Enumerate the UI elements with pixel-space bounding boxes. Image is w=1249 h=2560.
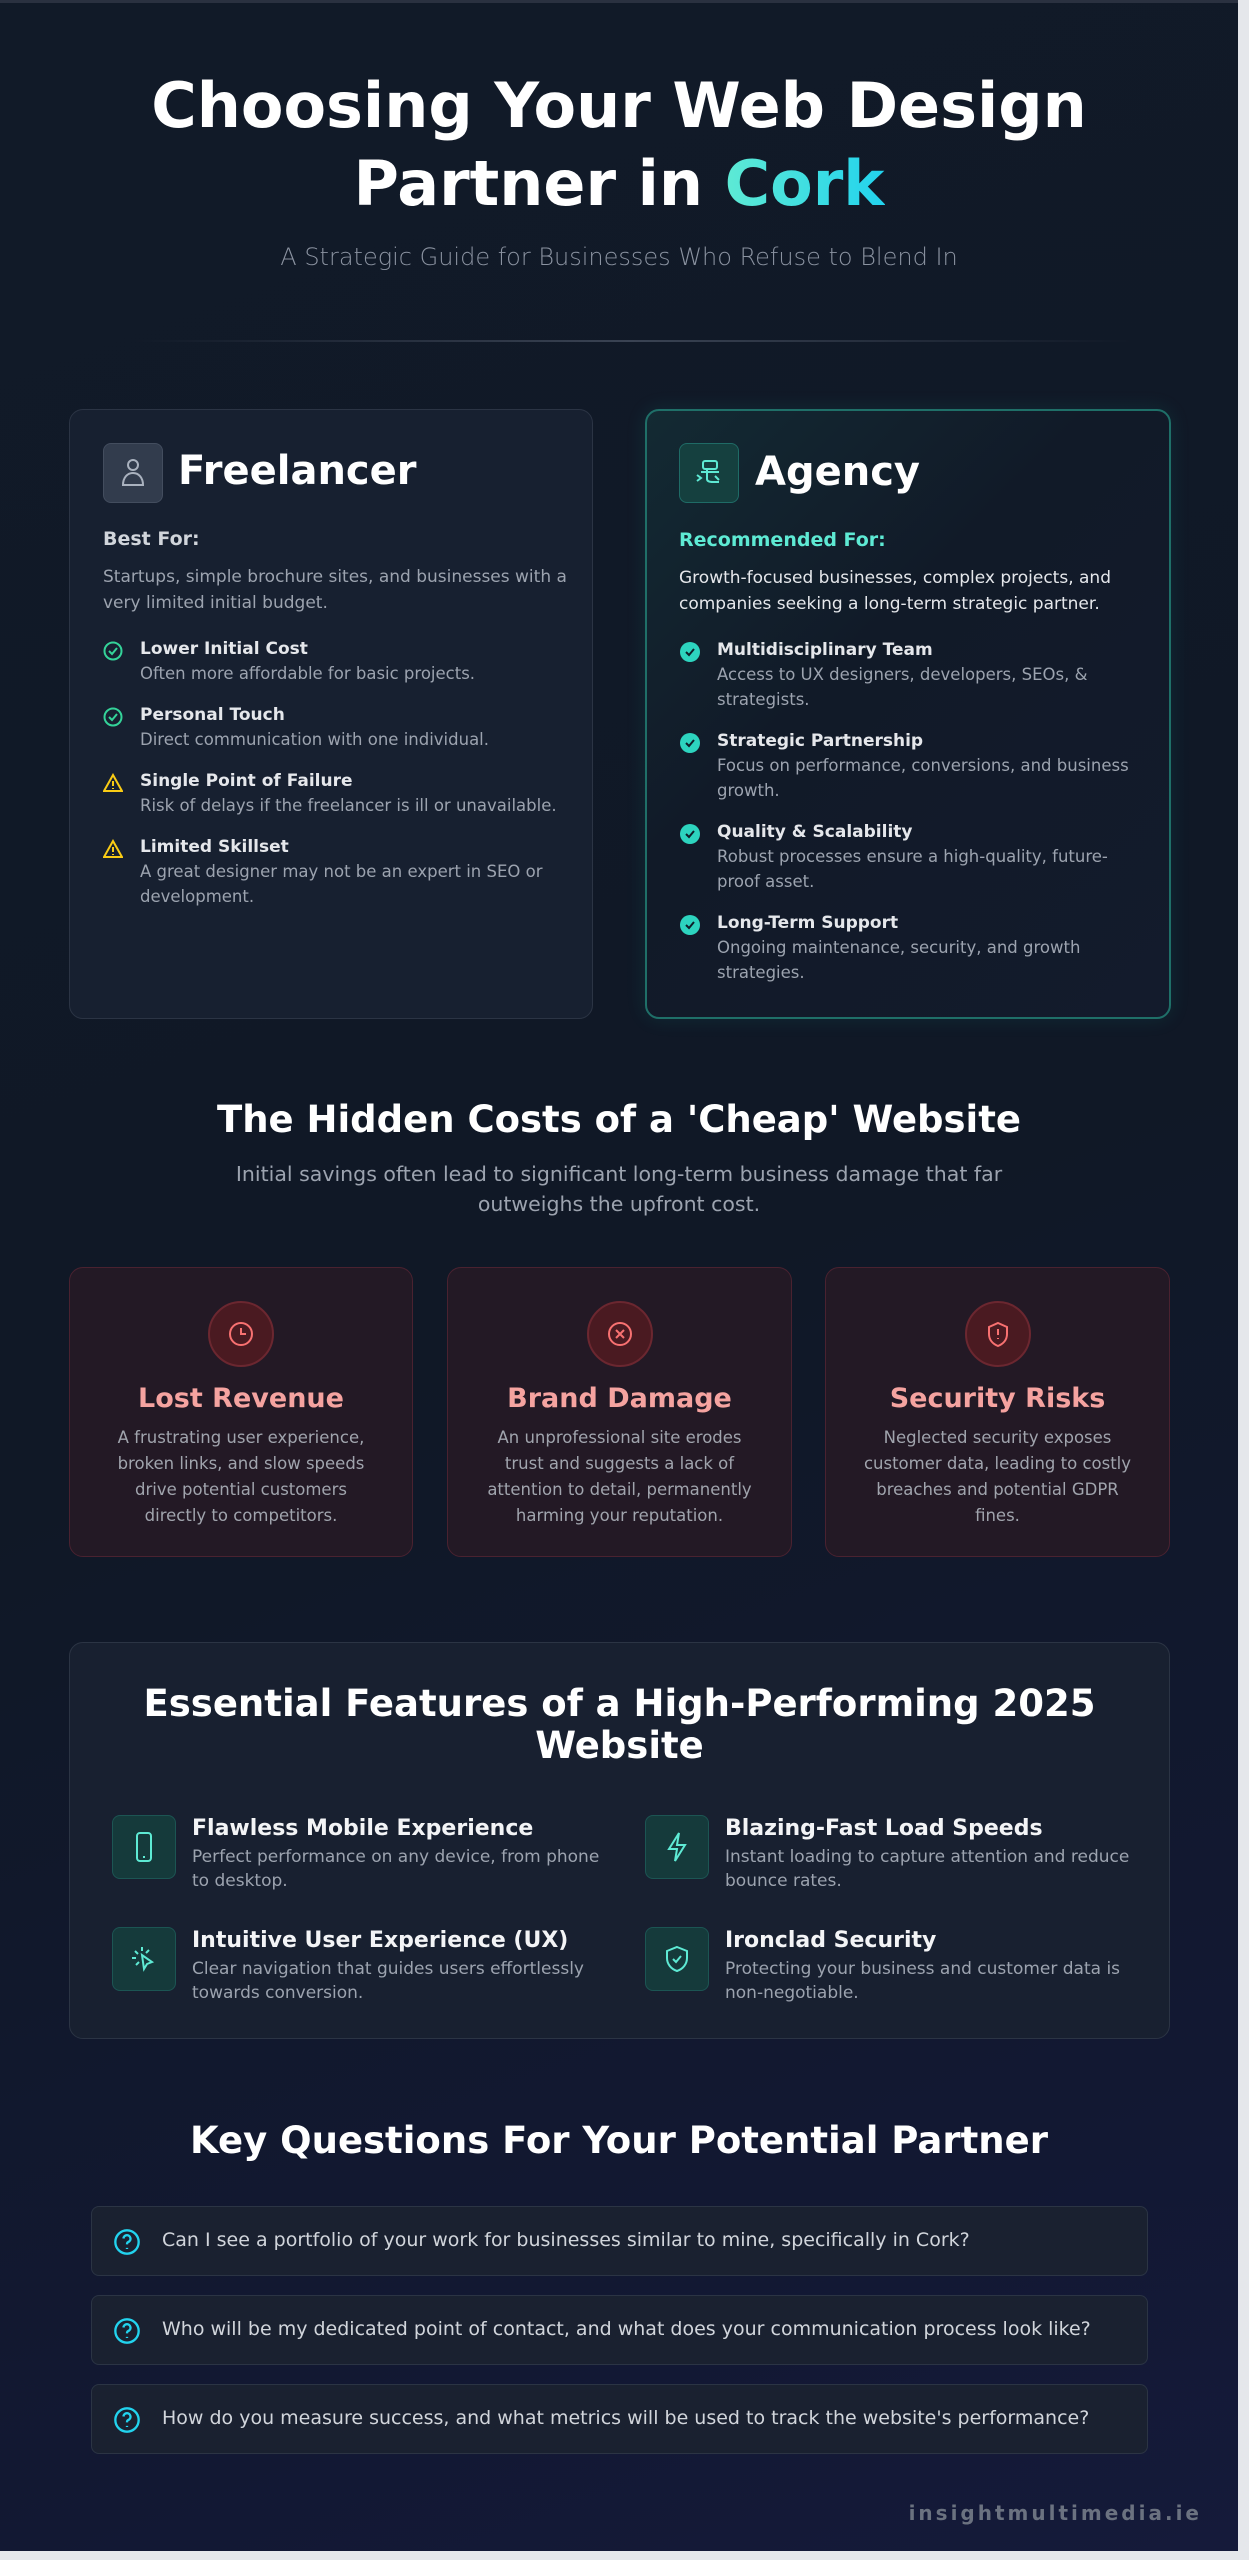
feature: security: Ironclad Security: [725, 1928, 936, 1953]
icon: person: [103, 443, 163, 503]
list: Focus on performance, conversions, and business growth.: [717, 756, 1129, 800]
subtitle: hidden costs: Initial savings often lead to significant long-term business damage that far outweighs the upfront cost.: [236, 1162, 1002, 1216]
icon: agency: [679, 443, 739, 503]
feature: ux: Clear navigation that guides users effortlessly: [192, 1959, 584, 1979]
list: Single Point of Failure: [140, 771, 352, 791]
feature: ux: towards conversion.: [192, 1983, 363, 2003]
list: Lower Initial Cost: [140, 639, 308, 659]
best for: Startups, simple brochure sites, and businesses with a very limited initial budget.: [103, 567, 567, 613]
feature: speed: Blazing-Fast Load Speeds: [725, 1816, 1043, 1841]
panel: security risks: Neglected security exposes: [884, 1428, 1111, 1447]
panel: brand damage: harming your reputation.: [516, 1506, 723, 1525]
panel: lost revenue: drive potential customers: [135, 1480, 347, 1499]
panel: brand damage: trust and suggests a lack of: [505, 1454, 734, 1473]
list: Ongoing maintenance, security, and growth strategies.: [717, 938, 1080, 982]
panel: security risks: fines.: [975, 1506, 1020, 1525]
title: [151, 69, 1087, 220]
question 3: [91, 2384, 1148, 2454]
list: Long-Term Support: [717, 913, 898, 933]
feature: mobile: to desktop.: [192, 1871, 288, 1891]
list: Risk of delays if the freelancer is ill or unavailable.: [140, 796, 557, 815]
list: Quality & Scalability: [717, 822, 912, 842]
list: Strategic Partnership: [717, 731, 923, 751]
heading: [144, 1682, 1096, 1767]
best for: [103, 528, 567, 613]
question 2: Who will be my dedicated point of contact, and what does your communication process look like?: [162, 2318, 1091, 2340]
subtitle: A Strategic Guide for Businesses Who Refuse to Blend In: [280, 243, 958, 271]
panel: lost revenue: broken links, and slow speeds: [118, 1454, 364, 1473]
question 3: How do you measure success, and what metrics will be used to track the website's performance?: [162, 2407, 1089, 2429]
panel: lost revenue: A frustrating user experience,: [118, 1428, 364, 1447]
heading: Essential Features of a High-Performing 2025: [144, 1682, 1096, 1725]
list: [103, 639, 557, 906]
panel: lost revenue: directly to competitors.: [145, 1506, 337, 1525]
panel: security risks: Security Risks: [890, 1383, 1105, 1414]
recommended for: Growth-focused businesses, complex projects, and companies seeking a long-term strategic partner.: [679, 568, 1111, 614]
feature: mobile: Flawless Mobile Experience: [192, 1816, 533, 1841]
panel: freelancer: [69, 409, 593, 1019]
heading: key questions: Key Questions For Your Potential Partner: [190, 2119, 1048, 2162]
panel: lost revenue: Lost Revenue: [138, 1383, 344, 1414]
heading: Agency: [755, 449, 920, 495]
recommended for: [679, 529, 1111, 614]
panel: brand damage: An unprofessional site erodes: [497, 1428, 742, 1447]
list: Robust processes ensure a high-quality, future-proof asset.: [717, 847, 1108, 891]
feature: speed: [645, 1815, 1129, 1891]
list: [680, 640, 1129, 982]
list: Personal Touch: [140, 705, 285, 725]
list: Often more affordable for basic projects.: [140, 664, 475, 683]
list: Multidisciplinary Team: [717, 640, 933, 660]
question 1: Can I see a portfolio of your work for businesses similar to mine, specifically in Cork?: [162, 2229, 970, 2251]
best for: Best For:: [103, 528, 200, 550]
recommended for: Recommended For:: [679, 529, 886, 551]
icon: clock: [208, 1301, 274, 1367]
list: Access to UX designers, developers, SEOs, & strategists.: [717, 665, 1087, 709]
panel: essential features: [69, 1642, 1170, 2039]
title: Partner in Cork: [353, 147, 885, 220]
question 2: [91, 2295, 1148, 2365]
panel: lost revenue: [69, 1267, 413, 1557]
feature: security: non-negotiable.: [725, 1983, 859, 2003]
panel: security risks: breaches and potential GDPR: [876, 1480, 1119, 1499]
feature: security: [645, 1927, 1120, 2003]
feature: speed: Instant loading to capture attention and reduce: [725, 1847, 1129, 1867]
panel: agency: [645, 409, 1171, 1019]
panel: security risks: customer data, leading to costly: [864, 1454, 1131, 1473]
title: Choosing Your Web Design: [151, 69, 1087, 142]
panel: security risks: [825, 1267, 1170, 1557]
list: Direct communication with one individual.: [140, 730, 489, 749]
heading: hidden costs: The Hidden Costs of a 'Cheap' Website: [217, 1098, 1021, 1141]
icon: x circle: [586, 1301, 652, 1367]
feature: ux: [112, 1927, 584, 2003]
list: A great designer may not be an expert in SEO or development.: [140, 862, 543, 906]
feature: mobile: [112, 1815, 599, 1891]
panel: brand damage: [447, 1267, 792, 1557]
heading: Website: [535, 1724, 704, 1767]
feature: mobile: Perfect performance on any device, from phone: [192, 1847, 599, 1867]
footer brand: insightmultimedia.ie: [909, 2501, 1202, 2525]
panel: brand damage: Brand Damage: [507, 1383, 732, 1414]
feature: speed: bounce rates.: [725, 1871, 842, 1891]
feature: security: Protecting your business and customer data is: [725, 1959, 1120, 1979]
list: Limited Skillset: [140, 837, 289, 857]
heading: Freelancer: [178, 448, 416, 494]
icon: shield: [964, 1301, 1030, 1367]
question 1: [91, 2206, 1148, 2276]
feature: ux: Intuitive User Experience (UX): [192, 1928, 568, 1953]
panel: brand damage: attention to detail, permanently: [487, 1480, 752, 1499]
